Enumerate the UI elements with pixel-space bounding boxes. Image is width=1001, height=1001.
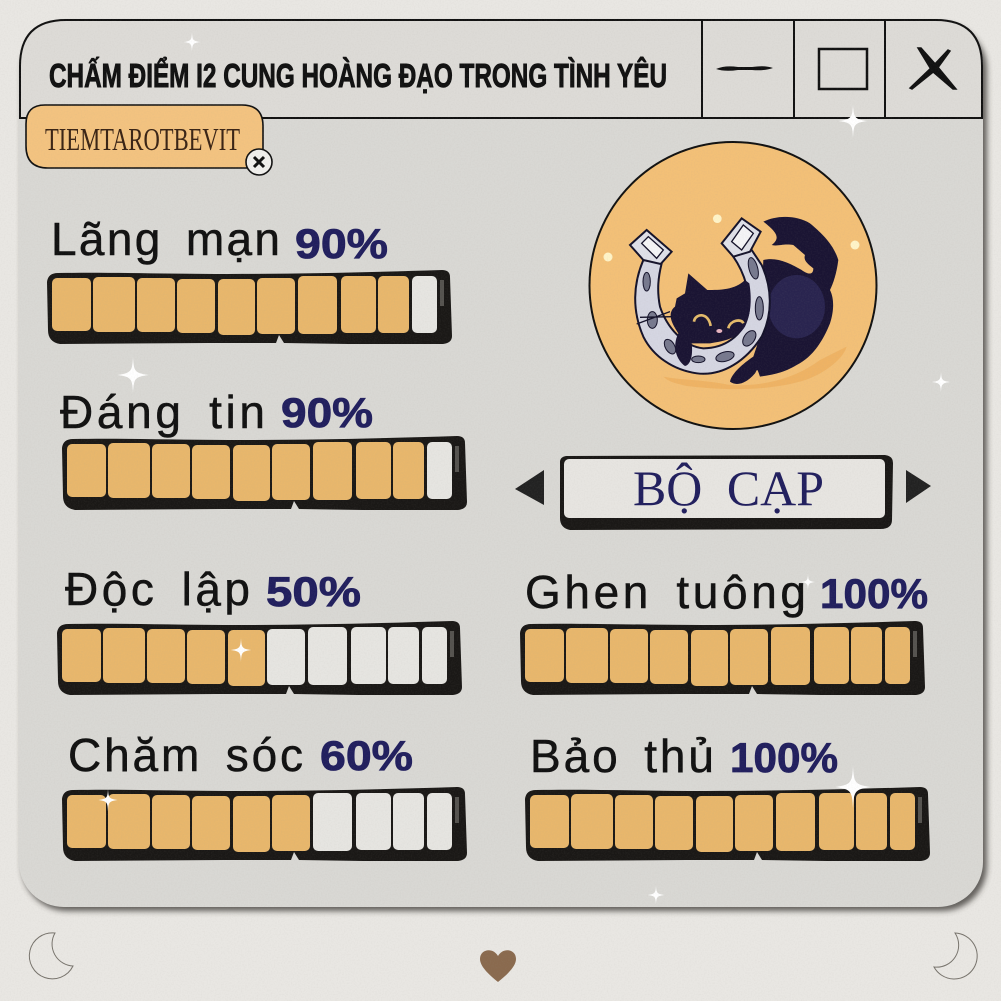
horseshoe tip left bbox=[630, 230, 672, 264]
icon: heart bbox=[480, 950, 516, 982]
label: Lãng mạn bbox=[51, 213, 280, 265]
label: Bảo thủ bbox=[530, 730, 714, 782]
percent: 100% bbox=[730, 734, 838, 781]
progress bar bbox=[520, 621, 925, 695]
brand text: TIEMTAROTBEVIT bbox=[45, 121, 240, 157]
stat: Độc lập 50% bbox=[57, 563, 462, 695]
label: Ghen tuông bbox=[525, 566, 806, 618]
zodiac name: BỘ CẠP bbox=[633, 460, 824, 516]
progress bar bbox=[57, 621, 462, 695]
glowing dot left bbox=[604, 252, 612, 262]
cat body and tail bbox=[730, 217, 838, 384]
stat: Ghen tuông 100% bbox=[520, 566, 928, 695]
progress bar bbox=[47, 270, 452, 344]
heading: window title: CHẤM ĐIỂM I2 CUNG HOÀNG ĐẠO TRONG TÌNH YÊU bbox=[49, 57, 667, 94]
label: Chăm sóc bbox=[68, 729, 303, 781]
name box inner bbox=[564, 459, 885, 518]
fur highlight bbox=[768, 275, 825, 338]
name box bbox=[560, 455, 893, 530]
arrow right bbox=[906, 470, 931, 503]
illustration: black cat with horseshoe in circle bbox=[590, 142, 876, 429]
arrow left bbox=[515, 470, 544, 505]
decorative moon right bbox=[934, 933, 977, 979]
glowing dot right bbox=[850, 240, 860, 250]
ground shadow bbox=[663, 347, 847, 389]
progress bar bbox=[62, 436, 467, 510]
percent: 60% bbox=[320, 732, 413, 779]
sparkles bbox=[98, 32, 950, 905]
cat nose bbox=[716, 329, 722, 333]
horseshoe metal bbox=[635, 250, 770, 374]
stat: Chăm sóc 60% bbox=[62, 729, 467, 861]
gold circle bbox=[590, 142, 876, 429]
name selector bbox=[515, 455, 931, 530]
stat: Bảo thủ 100% bbox=[525, 730, 930, 861]
title bar bbox=[20, 20, 982, 118]
horseshoe holes bbox=[643, 257, 763, 364]
stat: Đáng tin 90% bbox=[60, 386, 467, 510]
cat eyes bbox=[694, 315, 743, 328]
whiskers bbox=[637, 312, 672, 324]
glowing dot top bbox=[713, 214, 722, 223]
title bar dividers bbox=[702, 20, 885, 118]
tag: tiemtarotbevit bbox=[26, 105, 272, 175]
icon: maximize bbox=[819, 49, 867, 89]
decorative moon left bbox=[29, 933, 73, 979]
cat head and paw bbox=[671, 273, 751, 366]
percent: 50% bbox=[266, 568, 361, 615]
stat: Lãng mạn 90% bbox=[47, 213, 452, 344]
percent: 90% bbox=[281, 389, 373, 436]
percent: 100% bbox=[820, 570, 928, 617]
horseshoe tip right bbox=[722, 218, 761, 257]
icon: minimize bbox=[716, 66, 773, 71]
label: Đáng tin bbox=[60, 386, 265, 438]
progress bar bbox=[62, 787, 467, 861]
progress bar bbox=[525, 787, 930, 861]
label: Độc lập bbox=[65, 563, 250, 615]
icon: tag close button bbox=[246, 149, 272, 175]
percent: 90% bbox=[295, 220, 388, 267]
icon: close bbox=[910, 48, 956, 89]
